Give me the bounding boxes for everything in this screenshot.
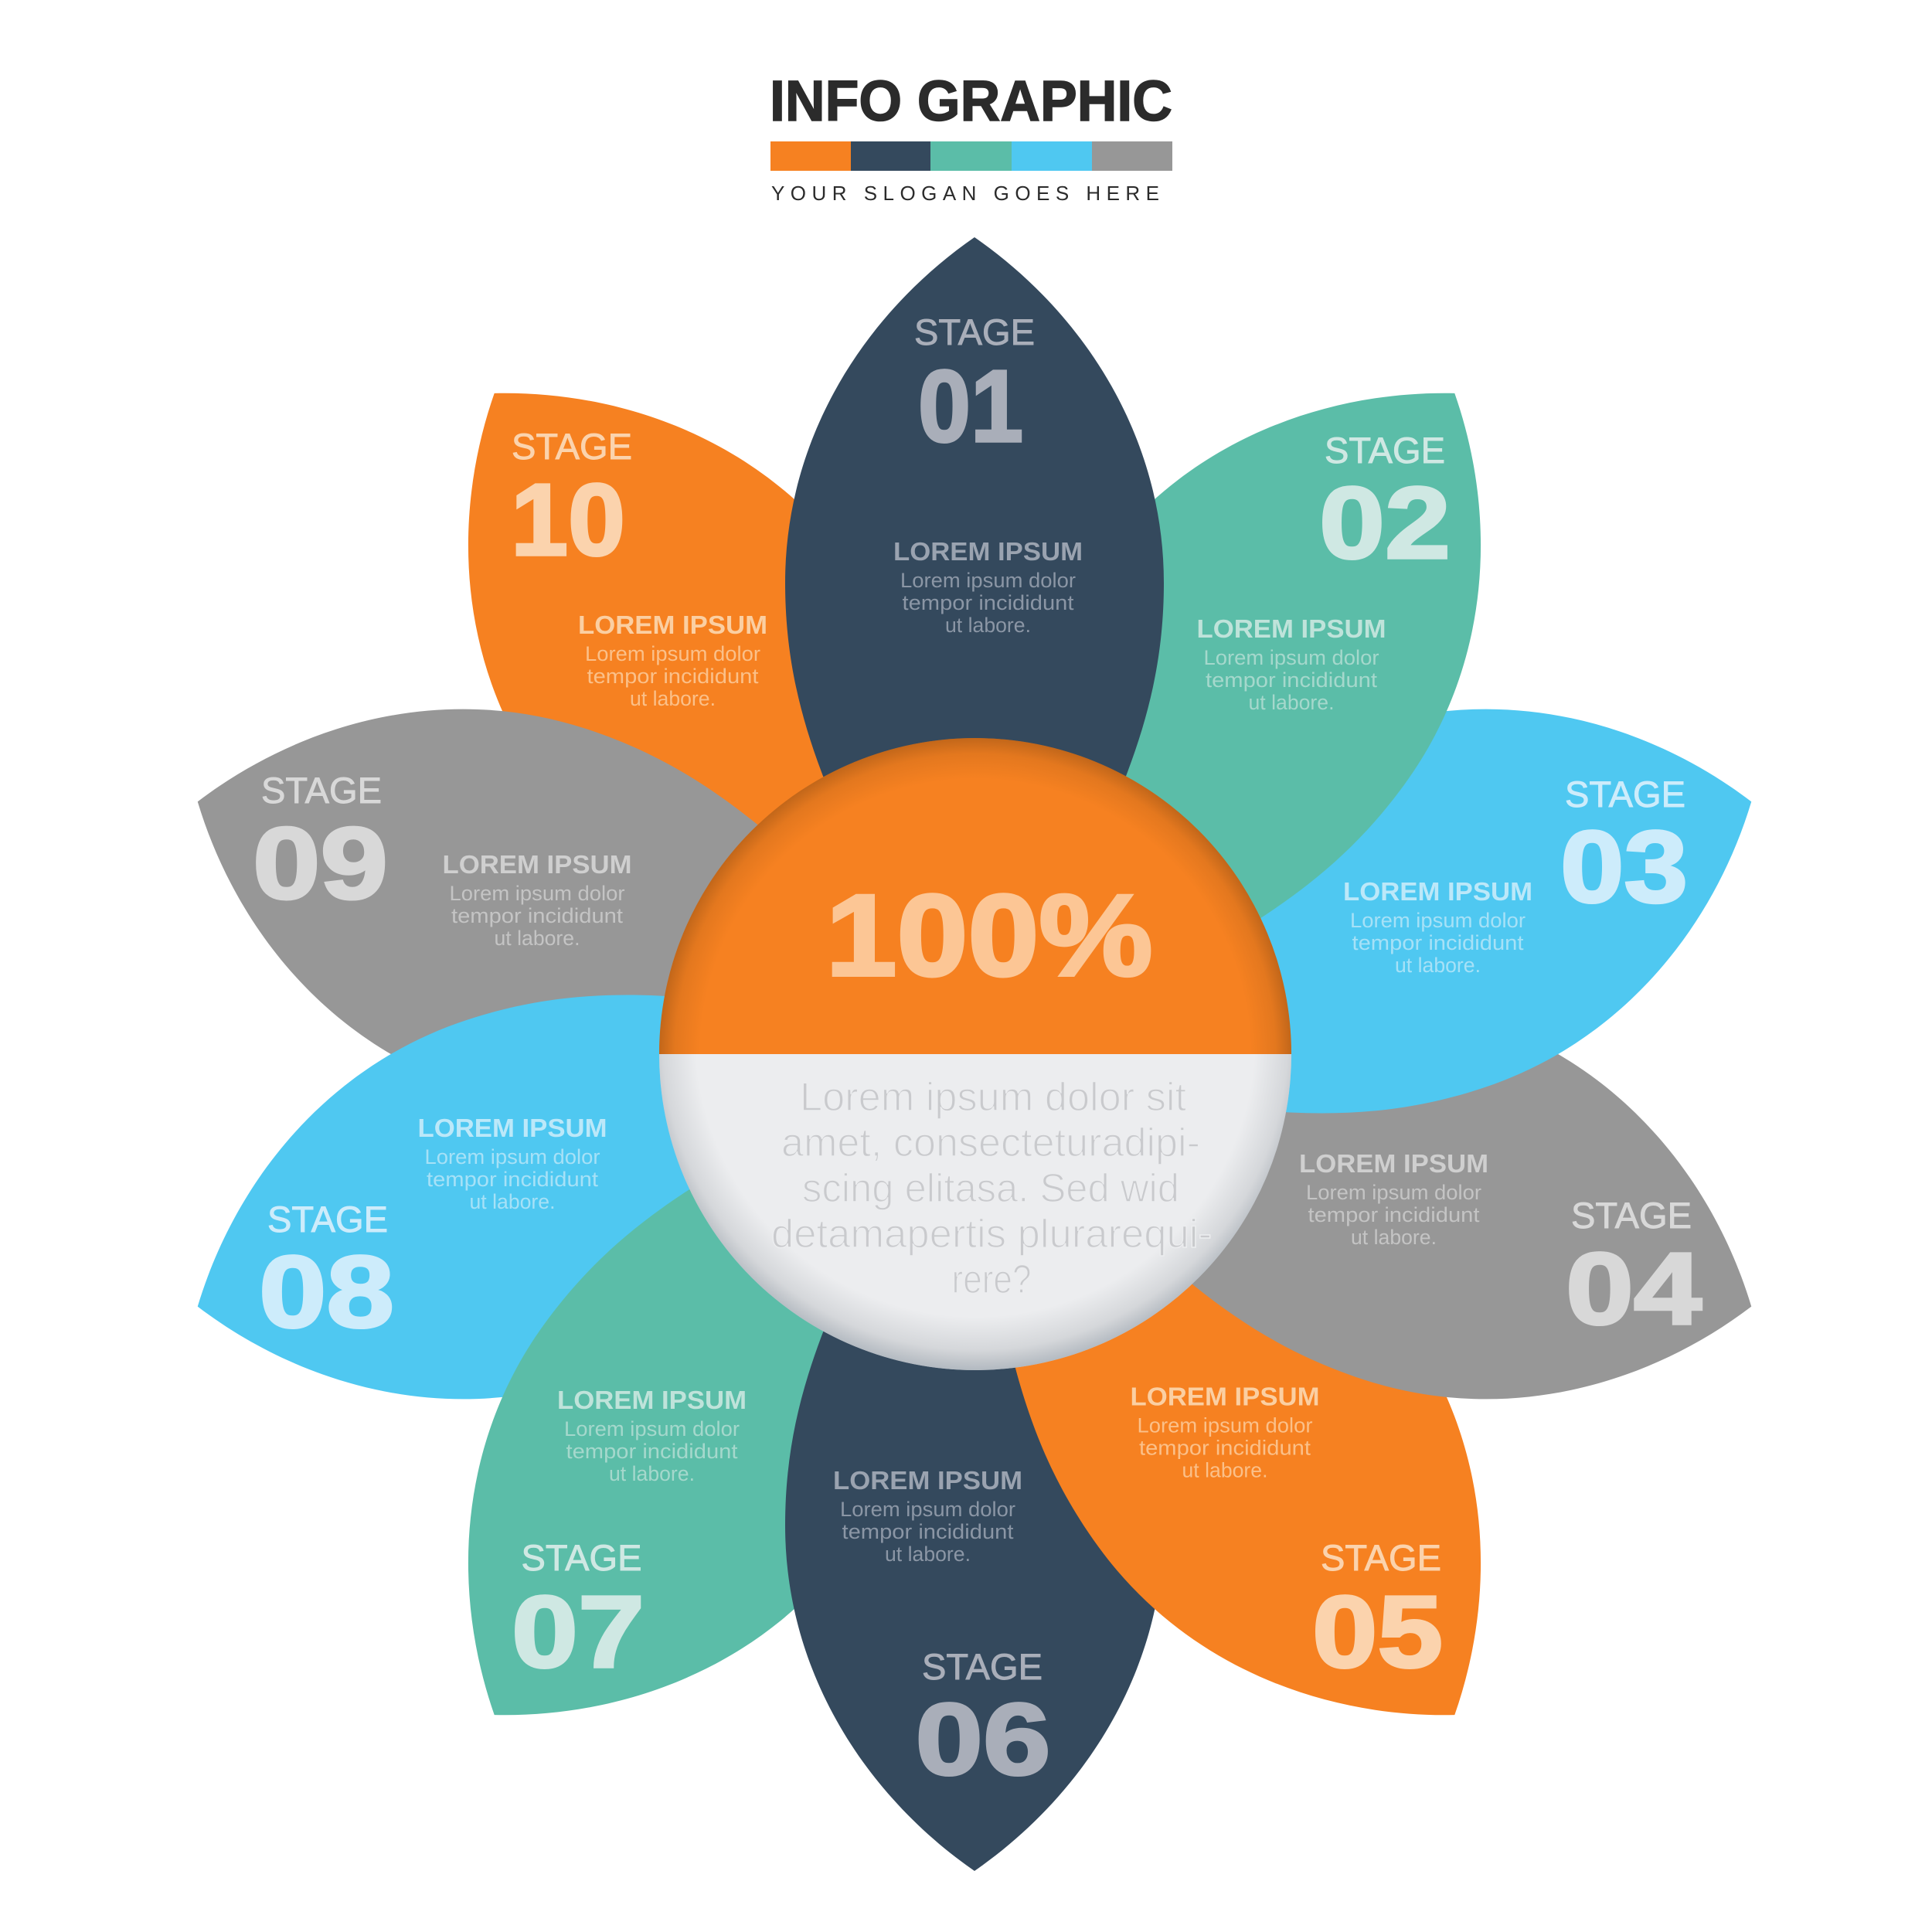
petal: stage 10 xyxy=(342,282,1037,1040)
petal: stage 07 xyxy=(342,1068,1037,1826)
text block 08: LOREM IPSUM xyxy=(417,1114,607,1142)
stage label 08 xyxy=(259,1199,394,1349)
petal: stage 05 xyxy=(912,1068,1607,1826)
text block 01: Lorem ipsum dolor xyxy=(900,569,1076,592)
petal: stage 08 xyxy=(139,922,886,1487)
text block 10: tempor incididunt xyxy=(587,665,759,688)
text block 07: Lorem ipsum dolor xyxy=(564,1417,740,1440)
text block 06: LOREM IPSUM xyxy=(833,1466,1022,1495)
petal: stage 04 xyxy=(1063,922,1810,1487)
stage label 07: STAGE xyxy=(521,1537,641,1578)
text block 03: LOREM IPSUM xyxy=(1343,877,1532,906)
center description: detamapertis plurarequi- xyxy=(771,1212,1212,1257)
text block 08: ut labore. xyxy=(470,1190,555,1213)
stage label 05: STAGE xyxy=(1321,1537,1441,1578)
center description: Lorem ipsum dolor sit xyxy=(800,1075,1187,1120)
petal shape 02 xyxy=(912,282,1607,1040)
stage label 02: 02 xyxy=(1319,466,1451,580)
stage label 04: 04 xyxy=(1566,1232,1702,1345)
center description: rere? xyxy=(952,1257,1031,1302)
stage label 04 xyxy=(1566,1195,1702,1345)
center description: amet, consecteturadipi- xyxy=(781,1121,1200,1165)
text block 02 xyxy=(1196,614,1386,714)
stage label 03: STAGE xyxy=(1565,774,1685,815)
center top half xyxy=(659,738,1291,1054)
petal shape 01 xyxy=(785,237,1164,900)
petal shape 04 xyxy=(1063,922,1810,1487)
slogan: YOUR SLOGAN GOES HERE xyxy=(771,182,1159,205)
petal shape 06 xyxy=(785,1209,1164,1871)
stage label 03: 03 xyxy=(1560,810,1688,923)
text block 07: tempor incididunt xyxy=(566,1440,738,1463)
text block 05: LOREM IPSUM xyxy=(1130,1382,1320,1411)
center description: scing elitasa. Sed wid xyxy=(802,1166,1179,1211)
stage label 02: STAGE xyxy=(1325,430,1445,471)
text block 08: tempor incididunt xyxy=(427,1168,599,1191)
text block 02: ut labore. xyxy=(1249,691,1334,714)
petal shape 10 xyxy=(342,282,1037,1040)
text block 03: tempor incididunt xyxy=(1352,931,1524,954)
text block 05 xyxy=(1130,1382,1320,1482)
text block 04 xyxy=(1299,1149,1488,1249)
stage label 10: 10 xyxy=(511,463,625,577)
stage label 09 xyxy=(253,770,388,920)
text block 05: tempor incididunt xyxy=(1139,1436,1311,1459)
stage label 05: 05 xyxy=(1312,1575,1443,1689)
text block 07 xyxy=(557,1386,747,1485)
text block 08 xyxy=(417,1114,607,1213)
text block 04: ut labore. xyxy=(1351,1226,1437,1249)
petal: stage 02 xyxy=(912,282,1607,1040)
text block 02: tempor incididunt xyxy=(1206,668,1378,692)
petal shape 07 xyxy=(342,1068,1037,1826)
petal shape 03 xyxy=(1063,621,1810,1186)
text block 04: Lorem ipsum dolor xyxy=(1306,1181,1481,1204)
petal: stage 09 xyxy=(139,621,886,1186)
stage label 08: STAGE xyxy=(267,1199,388,1240)
text block 07: ut labore. xyxy=(609,1462,695,1485)
text block 06: tempor incididunt xyxy=(842,1520,1014,1543)
text block 04: tempor incididunt xyxy=(1308,1203,1480,1226)
petal shape 05 xyxy=(912,1068,1607,1826)
text block 09: tempor incididunt xyxy=(451,904,624,927)
stage label 01: 01 xyxy=(918,349,1023,463)
text block 10: Lorem ipsum dolor xyxy=(585,642,760,665)
title: INFO GRAPHIC xyxy=(770,69,1172,133)
text block 04: LOREM IPSUM xyxy=(1299,1149,1488,1178)
text block 09: Lorem ipsum dolor xyxy=(450,882,625,905)
petal: stage 06 xyxy=(785,1209,1164,1871)
text block 06: ut labore. xyxy=(885,1543,971,1566)
stage label 08: 08 xyxy=(259,1235,394,1349)
petal shape 09 xyxy=(139,621,886,1186)
text block 01: LOREM IPSUM xyxy=(893,537,1083,566)
stage label 06 xyxy=(915,1646,1051,1796)
stage label 03 xyxy=(1560,774,1688,923)
text block 03: ut labore. xyxy=(1395,954,1481,977)
stage label 04: STAGE xyxy=(1571,1195,1692,1236)
text block 09: ut labore. xyxy=(495,927,580,950)
stage label 06: STAGE xyxy=(922,1646,1043,1687)
text block 03 xyxy=(1343,877,1532,977)
text block 02: Lorem ipsum dolor xyxy=(1204,646,1379,669)
center description xyxy=(771,1075,1212,1302)
text block 03: Lorem ipsum dolor xyxy=(1350,909,1526,932)
stage label 07 xyxy=(512,1537,645,1689)
stage label 09: STAGE xyxy=(261,770,382,811)
text block 10: ut labore. xyxy=(630,687,716,710)
text block 06 xyxy=(833,1466,1022,1566)
percentage: 100% xyxy=(825,870,1153,1000)
text block 05: Lorem ipsum dolor xyxy=(1138,1414,1313,1437)
text block 01: ut labore. xyxy=(945,614,1031,637)
text block 06: Lorem ipsum dolor xyxy=(840,1498,1015,1521)
text block 09 xyxy=(442,850,632,950)
stage label 09: 09 xyxy=(253,807,388,920)
petal shape 08 xyxy=(139,922,886,1487)
text block 02: LOREM IPSUM xyxy=(1196,614,1386,643)
stage label 02 xyxy=(1319,430,1451,580)
text block 10: LOREM IPSUM xyxy=(578,611,767,639)
text block 09: LOREM IPSUM xyxy=(442,850,632,879)
text block 07: LOREM IPSUM xyxy=(557,1386,747,1414)
text block 08: Lorem ipsum dolor xyxy=(425,1145,600,1168)
stage label 01: STAGE xyxy=(914,311,1035,352)
stage label 05 xyxy=(1312,1537,1443,1689)
center circle xyxy=(659,738,1291,1370)
stage label 10: STAGE xyxy=(512,426,632,467)
center bottom half xyxy=(659,1054,1291,1370)
text block 05: ut labore. xyxy=(1182,1459,1267,1482)
stage label 06: 06 xyxy=(915,1682,1051,1796)
text block 10 xyxy=(578,611,767,710)
petal: stage 03 xyxy=(1063,621,1810,1186)
text block 01 xyxy=(893,537,1083,637)
petal: stage 01 xyxy=(785,237,1164,900)
text block 01: tempor incididunt xyxy=(903,591,1074,614)
colour bar xyxy=(770,141,1172,171)
stage label 07: 07 xyxy=(512,1575,645,1689)
